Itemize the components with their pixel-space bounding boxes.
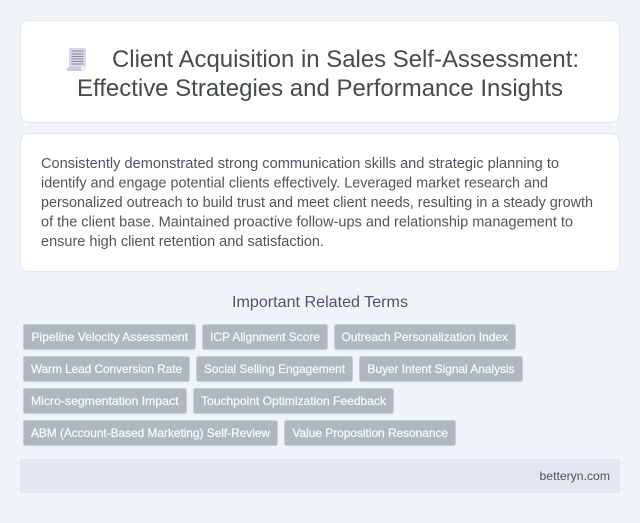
icon: document scroll bbox=[66, 48, 86, 71]
title: Effective Strategies and Performance Insights bbox=[77, 75, 563, 102]
tag: outreach personalization index: Outreach Personalization Index bbox=[342, 330, 508, 344]
tag: value proposition resonance bbox=[284, 420, 456, 446]
title bbox=[77, 46, 579, 102]
panel: summary card bbox=[20, 134, 620, 272]
title: Client Acquisition in Sales Self-Assessment: bbox=[112, 46, 579, 73]
text block: self-assessment summary: Consistently demonstrated strong communication skills and strategic planning to bbox=[41, 156, 559, 172]
panel: title card bbox=[20, 20, 620, 122]
tag: abm self-review: ABM (Account-Based Marketing) Self-Review bbox=[31, 426, 270, 440]
tag: buyer intent signal analysis: Buyer Intent Signal Analysis bbox=[368, 362, 514, 376]
tag: pipeline velocity assessment bbox=[24, 324, 196, 350]
tag: touchpoint optimization feedback bbox=[194, 388, 394, 414]
tag: buyer intent signal analysis bbox=[360, 356, 522, 382]
text block: self-assessment summary: personalized outreach to build trust and meet client needs, resulting in a steady growth bbox=[41, 195, 593, 211]
tag: micro-segmentation impact: Micro-segmentation Impact bbox=[31, 394, 179, 408]
footer bbox=[20, 459, 620, 493]
tag: outreach personalization index bbox=[334, 324, 516, 350]
heading: important related terms: Important Related Terms bbox=[232, 294, 408, 311]
text block: self-assessment summary bbox=[41, 156, 593, 250]
tag: icp alignment score bbox=[202, 324, 328, 350]
tag: micro-segmentation impact bbox=[24, 388, 186, 414]
tag: warm lead conversion rate bbox=[24, 356, 190, 382]
text block: self-assessment summary: identify and engage potential clients effectively. Leveraged market research and bbox=[41, 176, 548, 192]
tag: icp alignment score: ICP Alignment Score bbox=[210, 330, 320, 344]
text block: self-assessment summary: ensure high client retention and satisfaction. bbox=[41, 234, 324, 250]
tag: social selling engagement: Social Selling Engagement bbox=[204, 362, 346, 376]
tag: value proposition resonance: Value Proposition Resonance bbox=[292, 426, 448, 440]
footer: site name: betteryn.com bbox=[540, 469, 610, 483]
tag: social selling engagement bbox=[196, 356, 352, 382]
panel: related terms tags bbox=[24, 324, 522, 446]
tag: touchpoint optimization feedback: Touchpoint Optimization Feedback bbox=[201, 394, 387, 408]
text block: self-assessment summary: of the client base. Maintained proactive follow-ups and relationship management to bbox=[41, 214, 573, 230]
tag: abm self-review bbox=[24, 420, 278, 446]
tag: warm lead conversion rate: Warm Lead Conversion Rate bbox=[31, 362, 182, 376]
tag: pipeline velocity assessment: Pipeline Velocity Assessment bbox=[32, 330, 189, 344]
